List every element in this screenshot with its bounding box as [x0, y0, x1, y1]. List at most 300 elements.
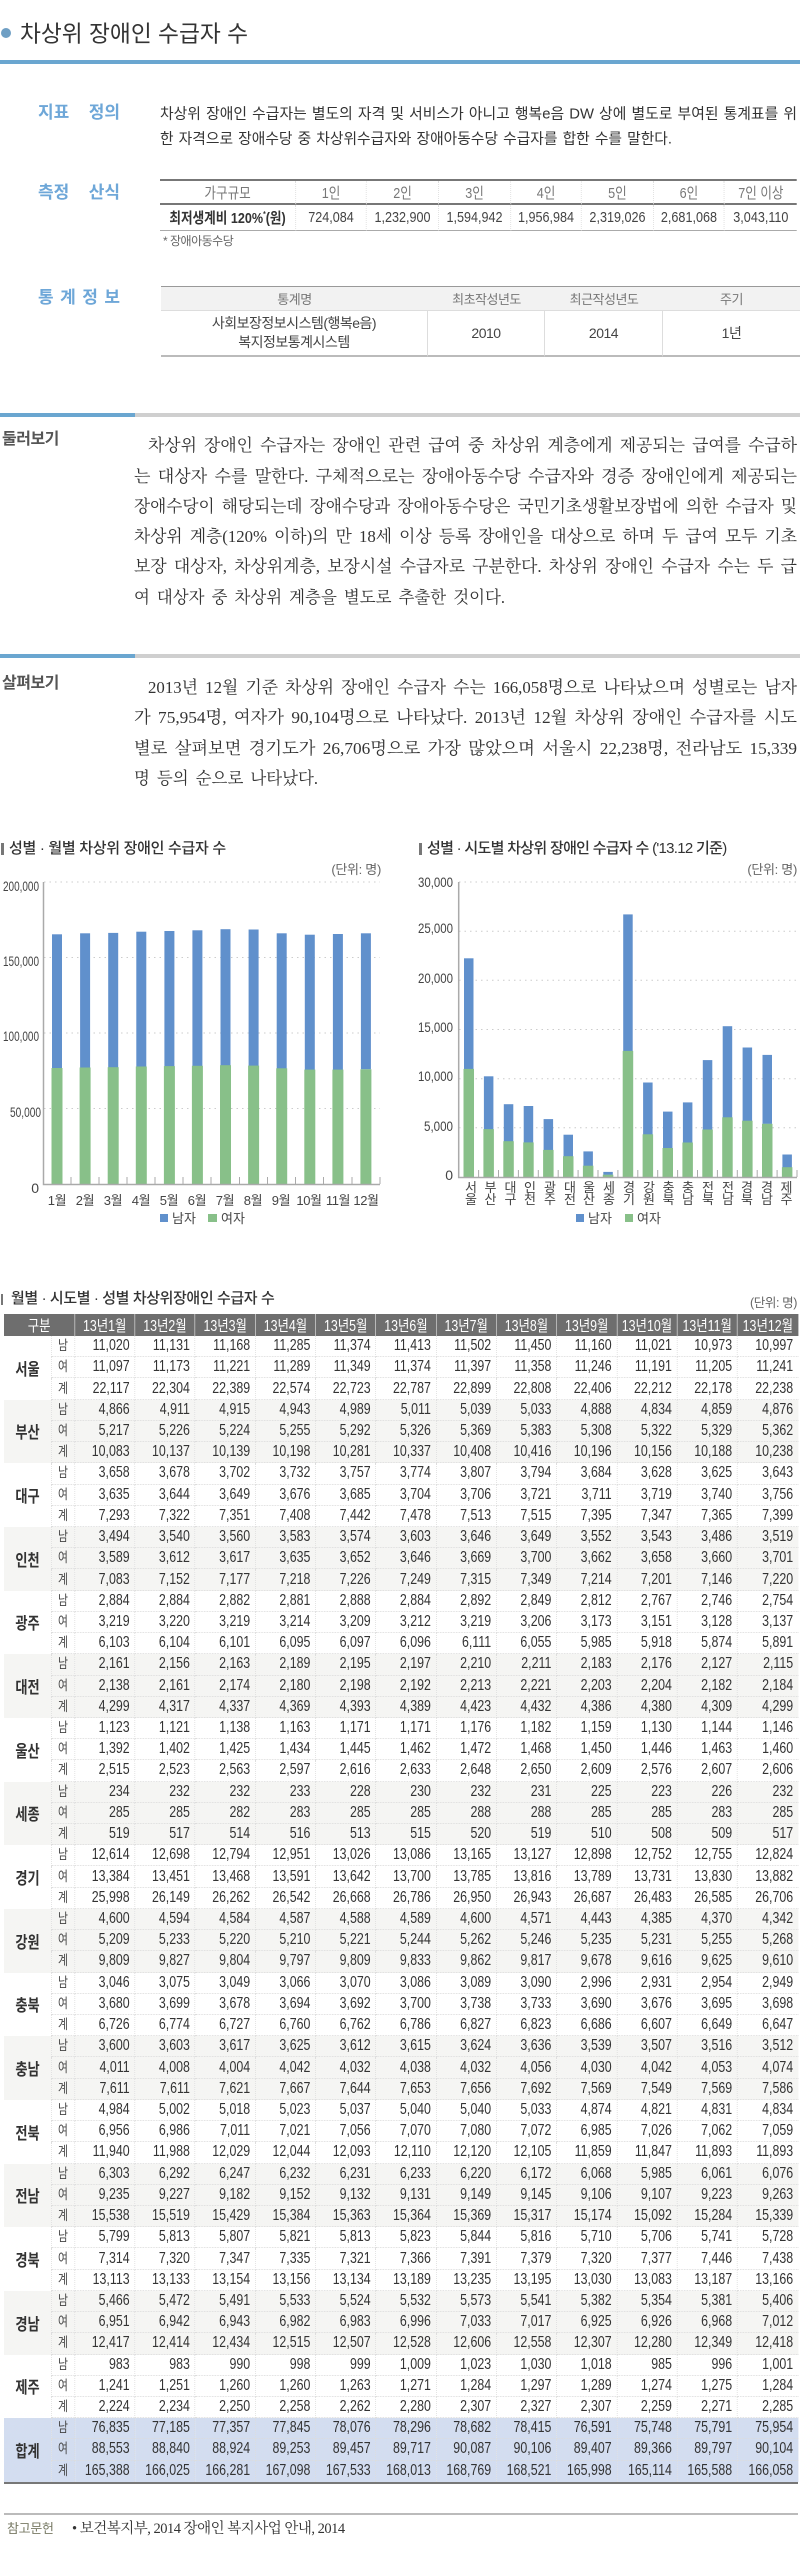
rows: 강원: 9,616 — [641, 1952, 672, 1969]
rows: 전남: 9,131 — [400, 2186, 431, 2203]
rows: 강원: 9,610 — [762, 1952, 793, 1969]
x axis labels: 강 — [643, 1180, 655, 1195]
rows: 전남: 6,076 — [762, 2165, 793, 2182]
heading: 통계정보: 통 계 정 보 — [38, 288, 120, 307]
rows: 합계: 89,366 — [634, 2440, 672, 2457]
rows: 강원: 남 — [58, 1911, 68, 1926]
rows: 광주: 6,104 — [159, 1634, 190, 1651]
rows: 충남: 4,032 — [460, 2059, 491, 2076]
table header: 13년8월 — [505, 1318, 548, 1335]
rows: 대구: 3,628 — [641, 1464, 672, 1481]
rows: 서울: 10,973 — [694, 1337, 732, 1354]
rows: 인천: 7,214 — [581, 1571, 612, 1588]
rows: 경남: 7,033 — [460, 2313, 491, 2330]
rows: 대전: 2,189 — [279, 1655, 310, 1672]
rows: 울산: 1,171 — [340, 1719, 371, 1736]
rows: 전남: 6,232 — [279, 2165, 310, 2182]
x axis labels: 3월 — [104, 1193, 122, 1208]
bar chart: 시도별 — [418, 874, 798, 1226]
rows: 경북: 7,320 — [159, 2250, 190, 2267]
table bottom rule — [4, 2482, 798, 2484]
rows: 경기: 13,816 — [513, 1868, 551, 1885]
rows: 합계: 166,058 — [748, 2462, 793, 2479]
rows: 경북: 13,133 — [152, 2271, 190, 2288]
rows: 경기: 13,785 — [453, 1868, 491, 1885]
rows: 서울: 11,191 — [635, 1358, 672, 1375]
rows: 전북: 7,026 — [641, 2122, 672, 2139]
rows: 대구: 7,399 — [762, 1507, 793, 1524]
rows: 충북: 3,086 — [400, 1974, 431, 1991]
rows: 강원: 여 — [58, 1932, 68, 1947]
rows: 경기: 26,706 — [755, 1889, 793, 1906]
rows: 전북: 7,011 — [220, 2122, 250, 2139]
rows: 제주: 999 — [350, 2356, 371, 2373]
rows: 부산: 4,943 — [279, 1401, 310, 1418]
rows: 대전: 2,197 — [400, 1655, 431, 1672]
x axis labels: 북 — [702, 1192, 714, 1207]
rows: 경남: 7,012 — [762, 2313, 793, 2330]
rows: 전북: 7,056 — [340, 2122, 371, 2139]
rows: 경남: 12,418 — [755, 2334, 793, 2351]
rows: 전남: 15,369 — [453, 2207, 491, 2224]
rows: 강원: 강원 — [15, 1934, 40, 1952]
table header: 13년2월 — [143, 1318, 187, 1335]
rows: 충남: 남 — [58, 2038, 68, 2053]
y axis labels: 15,000 — [418, 1019, 453, 1035]
rows: 부산: 4,915 — [219, 1401, 250, 1418]
rows: 제주: 2,307 — [581, 2398, 612, 2415]
rows: 경남: 5,533 — [279, 2292, 310, 2309]
rows: 전북: 4,831 — [701, 2101, 732, 2118]
rows: 세종: 세종 — [15, 1806, 40, 1824]
rows: 대구: 3,721 — [520, 1486, 551, 1503]
rows: 인천: 3,603 — [400, 1528, 431, 1545]
rows: 대구: 3,643 — [762, 1464, 793, 1481]
table note: * 장애아동수당 — [163, 234, 233, 248]
x axis labels: 구 — [505, 1192, 517, 1207]
rows: 전남: 15,174 — [574, 2207, 612, 2224]
legend — [576, 1211, 661, 1226]
rows: 합계: 89,253 — [272, 2440, 310, 2457]
rows: 충북: 6,762 — [340, 2016, 371, 2033]
rows: 경북: 13,235 — [453, 2271, 491, 2288]
rows: 충북: 3,698 — [762, 1995, 793, 2012]
rows: 세종: 232 — [470, 1783, 491, 1800]
rows: 전북: 12,120 — [453, 2143, 491, 2160]
legend — [160, 1211, 245, 1226]
x axis labels: 충 — [663, 1180, 675, 1195]
x axis labels: 북 — [663, 1192, 675, 1207]
rows: 충남: 3,512 — [762, 2037, 793, 2054]
rows: 부산: 4,876 — [762, 1401, 793, 1418]
rows: 울산: 1,468 — [520, 1740, 551, 1757]
rows: 울산: 1,392 — [99, 1740, 130, 1757]
table header: 구분 — [28, 1318, 51, 1335]
rows: 부산: 5,226 — [159, 1422, 190, 1439]
rows: 경기: 26,262 — [212, 1889, 250, 1906]
rows: 충북: 3,738 — [460, 1995, 491, 2012]
rows: 경남: 7,017 — [520, 2313, 551, 2330]
rows: 충북: 3,090 — [520, 1974, 551, 1991]
rows: 경남: 12,507 — [333, 2334, 371, 2351]
rows: 경기: 13,026 — [333, 1846, 371, 1863]
rows: 합계: 합계 — [15, 2443, 40, 2461]
rows: 대구: 계 — [58, 1508, 68, 1523]
rows: 합계: 88,553 — [92, 2440, 130, 2457]
rows: 부산: 10,238 — [755, 1443, 793, 1460]
rows: 대구 — [15, 1463, 798, 1527]
table: 최저생계비 — [160, 179, 797, 231]
rows: 충남: 7,656 — [460, 2080, 491, 2097]
rows: 제주: 2,258 — [279, 2398, 310, 2415]
rows: 광주: 5,891 — [762, 1634, 793, 1651]
rows: 세종: 여 — [58, 1805, 68, 1820]
x axis labels: 8월 — [244, 1193, 262, 1208]
rows: 부산: 10,337 — [393, 1443, 431, 1460]
x axis labels: 11월 — [326, 1193, 350, 1208]
references item: • 보건복지부, 2014 장애인 복지사업 안내, 2014 — [72, 2521, 345, 2537]
rows: 강원: 계 — [58, 1953, 68, 1968]
rows: 전남: 9,235 — [99, 2186, 130, 2203]
legend: 여자 — [637, 1211, 661, 1226]
rows: 경기: 여 — [58, 1869, 68, 1884]
section bar: 둘러보기 — [0, 413, 800, 417]
rows: 충남: 여 — [58, 2060, 68, 2075]
rows: 제주: 1,260 — [219, 2377, 250, 2394]
x axis labels: 주 — [781, 1192, 793, 1207]
rows: 경북: 남 — [58, 2229, 68, 2244]
rows: 경남: 5,541 — [520, 2292, 551, 2309]
rows: 경북: 13,154 — [212, 2271, 250, 2288]
rows: 서울: 11,160 — [575, 1337, 612, 1354]
rows: 강원: 4,594 — [159, 1910, 190, 1927]
rows: 경남: 12,558 — [513, 2334, 551, 2351]
rows: 대구: 7,408 — [279, 1507, 310, 1524]
rows: 서울: 11,097 — [93, 1358, 130, 1375]
rows: 전북: 12,093 — [333, 2143, 371, 2160]
rows: 경남: 6,982 — [279, 2313, 310, 2330]
rows: 제주: 계 — [58, 2399, 68, 2414]
rows: 인천: 3,662 — [581, 1549, 612, 1566]
rows: 울산: 1,159 — [581, 1719, 612, 1736]
rows: 세종: 285 — [169, 1804, 190, 1821]
rows: 광주: 6,096 — [400, 1634, 431, 1651]
x axis labels: 대 — [564, 1180, 576, 1195]
rows: 전남: 전남 — [15, 2188, 40, 2206]
rows: 경북: 7,335 — [279, 2250, 310, 2267]
table: 통계정보: 최근작성년도 — [570, 292, 638, 307]
rows: 서울: 11,358 — [514, 1358, 551, 1375]
rows: 대전: 2,161 — [99, 1655, 130, 1672]
rows: 세종: 285 — [772, 1804, 793, 1821]
rows: 경북: 7,391 — [460, 2250, 491, 2267]
rows: 대구: 3,684 — [581, 1464, 612, 1481]
rows: 부산: 4,834 — [641, 1401, 672, 1418]
rows: 경기: 26,542 — [272, 1889, 310, 1906]
table header: 13년4월 — [264, 1318, 307, 1335]
rows: 인천: 7,083 — [99, 1571, 130, 1588]
rows: 세종: 계 — [58, 1826, 68, 1841]
rows: 전남: 15,339 — [755, 2207, 793, 2224]
rows: 강원: 5,220 — [219, 1931, 250, 1948]
rows: 인천: 3,552 — [581, 1528, 612, 1545]
rows: 전북: 12,110 — [394, 2143, 431, 2160]
rows: 제주: 여 — [58, 2378, 68, 2393]
rows: 제주: 2,285 — [762, 2398, 793, 2415]
rows: 강원: 9,862 — [460, 1952, 491, 1969]
rows: 인천: 3,543 — [641, 1528, 672, 1545]
rows: 서울: 22,574 — [272, 1380, 310, 1397]
rows: 대구: 7,515 — [520, 1507, 551, 1524]
rows: 대구: 3,807 — [460, 1464, 491, 1481]
rows: 경기: 25,998 — [92, 1889, 130, 1906]
rows: 울산: 1,460 — [762, 1740, 793, 1757]
text block: 둘러보기: 장애수당이 해당되는데 장애수당과 장애아동수당은 국민기초생활보장법에 의한 수급자 및 — [134, 496, 797, 516]
rows: 제주: 1,284 — [762, 2377, 793, 2394]
rows: 경남: 6,968 — [701, 2313, 732, 2330]
rows: 충남: 3,600 — [99, 2037, 130, 2054]
rows: 경기: 12,755 — [694, 1846, 732, 1863]
x axis labels: 경 — [761, 1180, 773, 1195]
rows: 대전: 2,176 — [641, 1655, 672, 1672]
rows: 부산: 10,156 — [634, 1443, 672, 1460]
x axis labels: 제 — [781, 1180, 792, 1195]
rows: 대구: 7,513 — [460, 1507, 491, 1524]
rows: 광주: 3,219 — [219, 1613, 250, 1630]
rows: 세종: 282 — [229, 1804, 250, 1821]
rows: 대전: 2,204 — [641, 1677, 672, 1694]
rows: 제주: 1,275 — [701, 2377, 732, 2394]
rows: 강원: 5,209 — [99, 1931, 130, 1948]
rows: 전남: 남 — [58, 2166, 68, 2181]
rows: 세종: 516 — [290, 1825, 310, 1842]
rows: 울산: 1,130 — [641, 1719, 672, 1736]
rows: 서울: 11,246 — [575, 1358, 612, 1375]
rows: 세종: 230 — [410, 1783, 431, 1800]
rows: 세종: 520 — [470, 1825, 491, 1842]
rows: 전남: 6,247 — [219, 2165, 250, 2182]
rows: 충북: 3,699 — [159, 1995, 190, 2012]
table header: 13년5월 — [324, 1318, 367, 1335]
text block: 살펴보기: 가 75,954명, 여자가 90,104명으로 나타났다. 2013년 12월 차상위 장애인 수급자를 시도 — [134, 707, 798, 727]
rows: 인천: 계 — [58, 1572, 68, 1587]
text block: 살펴보기: 2013년 12월 기준 차상위 장애인 수급자 수는 166,058명으로 나타났으며 성별로는 남자 — [148, 677, 798, 697]
rows: 세종: 288 — [531, 1804, 551, 1821]
rows: 충남: 3,516 — [701, 2037, 732, 2054]
rows: 세종: 285 — [109, 1804, 130, 1821]
x axis labels: 원 — [643, 1192, 655, 1207]
rows: 충북: 6,686 — [581, 2016, 612, 2033]
rows: 부산: 10,416 — [513, 1443, 551, 1460]
rows: 전남: 15,364 — [393, 2207, 431, 2224]
rows: 세종: 232 — [772, 1783, 793, 1800]
text block: 살펴보기 — [134, 677, 798, 788]
rows: 대전: 2,156 — [159, 1655, 190, 1672]
rows: 제주: 2,262 — [340, 2398, 371, 2415]
rows: 세종: 509 — [711, 1825, 732, 1842]
rows: 경기: 13,451 — [152, 1868, 190, 1885]
rows: 충북: 3,678 — [219, 1995, 250, 2012]
rows: 서울: 22,899 — [453, 1380, 491, 1397]
references label: 참고문헌 — [7, 2521, 54, 2536]
y axis labels: 50,000 — [10, 1104, 41, 1120]
rows: 충북: 6,760 — [279, 2016, 310, 2033]
x axis labels — [465, 1180, 793, 1207]
rows: 전북: 11,940 — [93, 2143, 130, 2160]
x axis labels: 1월 — [48, 1193, 66, 1208]
series: 남자 blue segments — [52, 929, 371, 1071]
rows: 충남: 7,611 — [160, 2080, 190, 2097]
rows: 울산: 1,144 — [701, 1719, 732, 1736]
rows: 충남: 4,004 — [219, 2059, 250, 2076]
rows: 강원: 5,244 — [400, 1931, 431, 1948]
x axis labels: 부 — [485, 1180, 497, 1195]
rows: 충남: 3,615 — [400, 2037, 431, 2054]
rows: 부산: 10,188 — [694, 1443, 732, 1460]
rows: 서울: 22,178 — [694, 1380, 732, 1397]
rows: 충북: 6,827 — [460, 2016, 491, 2033]
rows: 세종: 228 — [350, 1783, 371, 1800]
rows: 대전: 2,203 — [581, 1677, 612, 1694]
rows: 대전: 계 — [58, 1699, 68, 1714]
legend: 남자 — [588, 1211, 612, 1226]
rows: 광주: 6,097 — [340, 1634, 371, 1651]
rows: 경기: 13,591 — [272, 1868, 310, 1885]
rows: 광주: 3,206 — [520, 1613, 551, 1630]
rows: 광주: 계 — [58, 1635, 68, 1650]
rows: 울산: 계 — [58, 1762, 68, 1777]
rows: 경남: 5,472 — [159, 2292, 190, 2309]
rows: 대구: 3,711 — [582, 1486, 612, 1503]
rows: 인천: 3,652 — [340, 1549, 371, 1566]
rows: 합계: 90,104 — [755, 2440, 793, 2457]
rows: 합계: 89,457 — [333, 2440, 371, 2457]
rows: 충남: 3,539 — [581, 2037, 612, 2054]
rows: 경남: 6,983 — [340, 2313, 371, 2330]
rows: 강원: 5,221 — [340, 1931, 371, 1948]
rows: 광주: 6,095 — [279, 1634, 310, 1651]
rows: 강원: 5,246 — [520, 1931, 551, 1948]
chart unit: (단위: 명) — [331, 862, 381, 877]
y axis labels: 100,000 — [3, 1028, 39, 1044]
rows: 제주: 2,280 — [400, 2398, 431, 2415]
table: 최저생계비: 최저생계비 120%*(원) — [169, 210, 286, 227]
rows: 전남: 6,231 — [340, 2165, 371, 2182]
rows: 광주: 5,874 — [701, 1634, 732, 1651]
rows: 충남: 4,074 — [762, 2059, 793, 2076]
rows: 광주: 6,055 — [520, 1634, 551, 1651]
rows: 서울: 22,212 — [634, 1380, 672, 1397]
rows: 제주: 2,224 — [99, 2398, 130, 2415]
rows: 광주: 6,111 — [462, 1634, 491, 1651]
y axis labels — [3, 878, 41, 1196]
rows: 서울: 11,349 — [334, 1358, 371, 1375]
rows: 광주: 5,918 — [641, 1634, 672, 1651]
rows: 울산: 1,402 — [159, 1740, 190, 1757]
rows: 경북: 5,710 — [581, 2228, 612, 2245]
chart title: 성별·시도별: 성별 · 시도별 차상위 장애인 수급자 수 ('13.12 기준) — [427, 840, 727, 857]
rows: 전북: 4,834 — [762, 2101, 793, 2118]
rows: 경북: 5,821 — [279, 2228, 310, 2245]
rows: 합계: 78,682 — [453, 2419, 491, 2436]
x axis labels: 12월 — [353, 1193, 379, 1208]
rows: 인천: 3,583 — [279, 1528, 310, 1545]
y axis labels: 200,000 — [3, 878, 39, 894]
rows: 대구: 3,706 — [460, 1486, 491, 1503]
rows: 대구: 7,293 — [99, 1507, 130, 1524]
rows: 강원 — [4, 1909, 798, 1973]
rows: 세종 — [4, 1782, 798, 1845]
rows: 강원: 4,600 — [99, 1910, 130, 1927]
rows: 경기: 12,951 — [272, 1846, 310, 1863]
rows: 대구: 3,678 — [159, 1464, 190, 1481]
rows: 서울: 11,020 — [93, 1337, 130, 1354]
rows: 경기: 26,585 — [694, 1889, 732, 1906]
rows: 인천: 7,349 — [520, 1571, 551, 1588]
rows: 전남: 계 — [58, 2208, 68, 2223]
rows: 전북: 4,821 — [641, 2101, 672, 2118]
rows: 서울: 22,389 — [212, 1380, 250, 1397]
rows: 대전: 2,174 — [219, 1677, 250, 1694]
rows: 강원: 4,385 — [641, 1910, 672, 1927]
rows: 합계: 167,533 — [326, 2462, 371, 2479]
rows: 광주: 여 — [58, 1614, 68, 1629]
rows: 경북: 7,347 — [219, 2250, 250, 2267]
rows: 제주: 2,259 — [641, 2398, 672, 2415]
rows: 서울: 22,808 — [513, 1380, 551, 1397]
rows: 인천: 3,612 — [159, 1549, 190, 1566]
rows: 충북: 3,694 — [279, 1995, 310, 2012]
rows: 경기: 12,752 — [634, 1846, 672, 1863]
rows: 광주: 3,209 — [340, 1613, 371, 1630]
rows: 광주: 3,173 — [581, 1613, 612, 1630]
rows: 울산: 1,446 — [641, 1740, 672, 1757]
rows: 제주: 996 — [711, 2356, 732, 2373]
x axis labels: 충 — [682, 1180, 694, 1195]
rows: 충북: 2,931 — [641, 1974, 672, 1991]
table: 통계정보 — [161, 286, 800, 357]
rows: 광주: 3,212 — [400, 1613, 431, 1630]
rows: 전남 — [4, 2164, 798, 2227]
rows: 부산: 4,888 — [581, 1401, 612, 1418]
rows: 전북: 11,893 — [756, 2143, 793, 2160]
rows: 강원: 4,571 — [520, 1910, 551, 1927]
rows: 전북 — [15, 2100, 798, 2164]
table header: 13년1월 — [83, 1318, 126, 1335]
rows: 제주: 1,251 — [159, 2377, 190, 2394]
rows: 부산: 4,989 — [340, 1401, 371, 1418]
rows: 경남: 5,491 — [219, 2292, 250, 2309]
rows: 경기: 계 — [58, 1890, 68, 1905]
rows: 세종: 508 — [651, 1825, 672, 1842]
rows: 경남: 5,524 — [340, 2292, 371, 2309]
rows: 부산: 5,322 — [641, 1422, 672, 1439]
rows: 전남: 15,092 — [634, 2207, 672, 2224]
rows: 전북: 남 — [58, 2102, 68, 2117]
rows: 전북: 4,984 — [99, 2101, 130, 2118]
table: 통계정보: 2014 — [589, 324, 618, 340]
rows: 경기 — [15, 1845, 798, 1909]
rows: 충남: 3,636 — [520, 2037, 551, 2054]
heading: 측정 산식: 측정 산식 — [38, 183, 120, 202]
rows: 경기: 26,950 — [453, 1889, 491, 1906]
rows: 충북: 3,690 — [581, 1995, 612, 2012]
rows: 합계: 88,840 — [152, 2440, 190, 2457]
rows: 경남: 5,466 — [99, 2292, 130, 2309]
rows: 충남: 7,586 — [762, 2080, 793, 2097]
rows: 충북: 2,954 — [701, 1974, 732, 1991]
rows: 충북: 2,996 — [581, 1974, 612, 1991]
